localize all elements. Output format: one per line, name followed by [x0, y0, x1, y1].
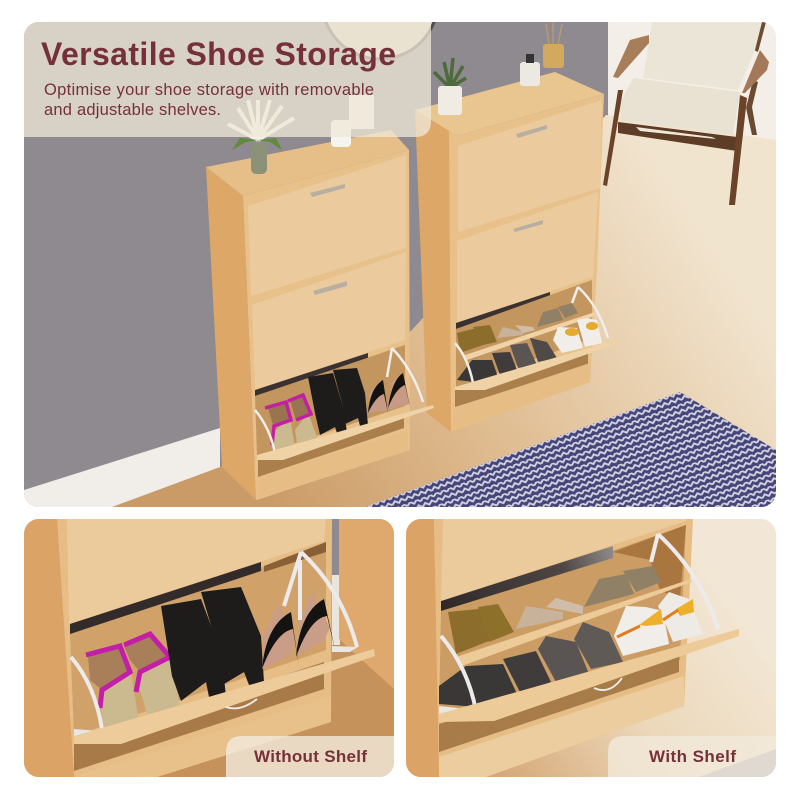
- neighbouring cabinet: [339, 519, 394, 689]
- bottom panel: [257, 430, 408, 500]
- under flap: [258, 416, 404, 477]
- label: without shelf: [226, 736, 394, 777]
- lower flap: [439, 629, 739, 722]
- dark gap: [70, 562, 261, 634]
- rug corner: [699, 749, 776, 777]
- drawer: [441, 519, 686, 601]
- subtitle: [44, 81, 374, 119]
- panel: with shelf close-up: [406, 519, 776, 777]
- mirror: [324, 22, 436, 60]
- pink sandals: [265, 395, 318, 452]
- black boots: [308, 368, 368, 435]
- cabinet side: [206, 167, 256, 500]
- lower flap: [455, 338, 622, 390]
- flap shelf: [74, 649, 375, 744]
- drawer: [67, 519, 326, 624]
- upper shoes: [457, 303, 578, 353]
- white hinge brackets: [455, 287, 608, 383]
- title overlay panel: [24, 22, 431, 137]
- armchair: [603, 22, 769, 205]
- cabinet front frame: [434, 519, 693, 777]
- bracket plate: [439, 706, 484, 714]
- dark gap: [441, 546, 613, 611]
- vase with flowers: [228, 100, 294, 174]
- white hinge brackets: [441, 534, 718, 711]
- cabinet side: [406, 519, 439, 777]
- bracket plates: [74, 646, 358, 736]
- sneakers: [553, 318, 602, 353]
- upper shoes: [448, 566, 661, 654]
- interior: [70, 545, 326, 736]
- under flap: [455, 352, 588, 407]
- rug: [365, 392, 776, 507]
- middle shelf: [465, 312, 595, 360]
- window and bright wall: [608, 22, 776, 147]
- middle shelf: [456, 579, 692, 667]
- potted plant: [434, 58, 466, 115]
- handle: [226, 699, 257, 708]
- bottom panel: [504, 364, 590, 396]
- picture frame: [349, 95, 374, 129]
- drawer lower: [252, 252, 406, 390]
- subtitle: and adjustable shelves.: [44, 101, 221, 119]
- bottom panel: [439, 676, 684, 777]
- interior: [255, 345, 405, 456]
- wall: [24, 22, 614, 507]
- under flap: [439, 650, 679, 752]
- cabinet side: [415, 110, 457, 432]
- cabinet side: [24, 519, 74, 777]
- cabinet front: [243, 150, 410, 500]
- candle: [331, 120, 351, 147]
- subtitle: Optimise your shoe storage with removable: [44, 81, 374, 99]
- title: Versatile Shoe Storage: [41, 36, 396, 72]
- backdrop floor: [24, 519, 394, 777]
- bottom panel: [76, 696, 331, 777]
- cabinet front frame: [57, 519, 332, 777]
- handle: [594, 678, 622, 690]
- label: without shelf: Without Shelf: [254, 747, 367, 766]
- drawer upper: [458, 100, 602, 232]
- drawer lower: [457, 192, 598, 323]
- flap: [257, 405, 434, 460]
- label: with shelf: [608, 736, 776, 777]
- interior dark right: [264, 542, 326, 572]
- lower shoes: [439, 622, 623, 707]
- black heels: [368, 373, 410, 413]
- black boots: [161, 587, 264, 701]
- black heels: [262, 592, 336, 669]
- drawer upper: [248, 155, 406, 296]
- dark gap: [456, 292, 550, 329]
- wall gap: [332, 519, 340, 575]
- dark gap: [255, 353, 368, 396]
- diffuser and small bottle: [520, 22, 564, 86]
- pink sandals: [86, 634, 180, 729]
- backdrop floor: [406, 519, 776, 777]
- label: with shelf: With Shelf: [649, 747, 736, 766]
- skirting gap: [332, 575, 340, 645]
- cabinet: back, with two open shelves: [415, 72, 622, 432]
- cabinet front: [449, 94, 604, 432]
- interior dark right: [613, 525, 686, 600]
- white hinge brackets: [71, 552, 357, 729]
- cabinet top face: [415, 72, 604, 136]
- handles: [516, 125, 547, 138]
- interior: [456, 280, 592, 388]
- handles: [310, 184, 345, 197]
- panel: main room scene: [24, 0, 776, 507]
- cabinet top face: [206, 130, 409, 196]
- lower shoes: [457, 338, 557, 382]
- white and yellow sneakers: [614, 592, 703, 656]
- baseboard: [24, 428, 220, 507]
- interior: [439, 525, 686, 714]
- wooden floor: [112, 115, 776, 507]
- cabinet: front, with open bottom drawer: [206, 130, 434, 500]
- panel: without shelf close-up: [24, 519, 394, 777]
- under flap: [74, 662, 324, 771]
- white hinge brackets: [255, 348, 423, 453]
